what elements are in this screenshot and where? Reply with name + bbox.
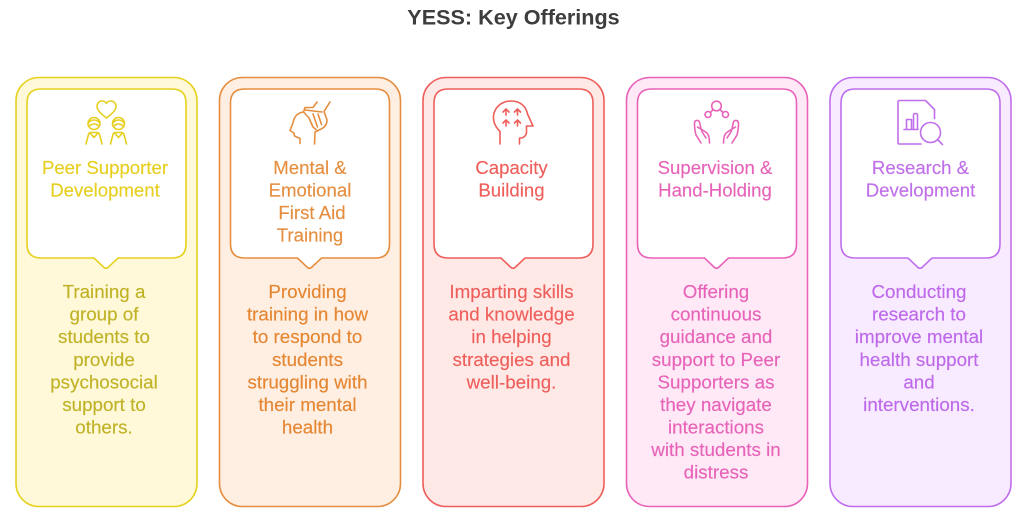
description text: psychosocial: [50, 372, 158, 392]
description text: [855, 281, 983, 415]
heading text: Training: [277, 224, 343, 246]
panel: Peer Supporter Development: [16, 78, 197, 506]
description text: continuous: [671, 304, 761, 324]
heading callout box: [434, 89, 593, 268]
description text: guidance and: [660, 326, 772, 347]
icon: hands holding connected nodes: [694, 101, 738, 143]
heading text: Development: [866, 180, 976, 200]
heading text: Peer Supporter: [42, 157, 168, 178]
description text: [247, 281, 368, 438]
heading text: [866, 157, 976, 200]
description text: health: [282, 416, 333, 438]
description text: strategies and: [453, 349, 570, 370]
icon: hand on head: [290, 102, 330, 144]
description text: struggling with: [247, 372, 368, 392]
heading text: [658, 157, 773, 200]
description text: provide: [73, 349, 135, 370]
panel: Capacity Building: [423, 78, 604, 506]
heading text: Emotional: [269, 180, 351, 200]
description text: Imparting skills: [449, 281, 574, 302]
panel: Research & Development: [830, 78, 1011, 506]
description text: Offering: [683, 281, 749, 302]
description text: group of: [70, 304, 139, 324]
heading callout box: [27, 89, 186, 268]
description text: improve mental: [855, 326, 983, 347]
description text: in helping: [471, 326, 552, 347]
description text: Training a: [63, 281, 146, 302]
description text: interventions.: [863, 394, 975, 415]
heading callout box: [841, 89, 1000, 268]
description text: and knowledge: [448, 304, 575, 324]
description text: support to Peer: [652, 349, 780, 370]
heading text: Supervision &: [658, 157, 773, 178]
description text: Providing: [268, 281, 347, 302]
description text: research to: [872, 304, 966, 324]
description text: to respond to: [253, 326, 362, 347]
description text: and: [903, 372, 935, 392]
description text: health support: [859, 349, 979, 370]
description text: distress: [684, 462, 748, 482]
icon: document with chart and magnifier: [898, 100, 942, 144]
panel: Supervision & Hand-Holding: [626, 78, 808, 506]
heading text: [42, 157, 168, 200]
heading callout box: [638, 89, 796, 268]
description text: they navigate: [660, 394, 772, 415]
description text: Conducting: [871, 281, 967, 302]
panel background: [423, 78, 604, 506]
description text: with students in: [650, 439, 781, 460]
panel background: [830, 78, 1011, 506]
heading text: Research &: [872, 157, 970, 178]
description text: support to: [62, 394, 146, 415]
panel background: [16, 78, 197, 506]
title: YESS: Key Offerings: [407, 4, 620, 30]
heading text: Building: [478, 180, 545, 200]
description text: Supporters as: [658, 372, 774, 392]
description text: training in how: [247, 304, 368, 324]
description text: their mental: [258, 394, 357, 415]
description text: [650, 281, 781, 482]
description text: well-being.: [466, 372, 556, 392]
heading text: Development: [50, 180, 161, 200]
icon: head with arrows: [493, 101, 533, 144]
heading callout box: [230, 89, 390, 268]
icon: two peers and heart: [86, 101, 126, 144]
heading text: [269, 157, 351, 246]
description text: [50, 281, 158, 438]
panel background: [626, 78, 808, 506]
description text: others.: [75, 416, 133, 438]
heading text: [475, 157, 548, 200]
description text: students to: [58, 326, 150, 347]
panel: Mental & Emotional First Aid Training: [220, 78, 400, 506]
description text: [448, 281, 575, 392]
description text: interactions: [668, 416, 764, 438]
heading text: Capacity: [475, 157, 548, 178]
panel background: [220, 78, 400, 506]
heading text: Hand-Holding: [658, 180, 772, 200]
description text: students: [272, 349, 343, 370]
heading text: First Aid: [278, 202, 346, 223]
heading text: Mental &: [273, 157, 347, 178]
